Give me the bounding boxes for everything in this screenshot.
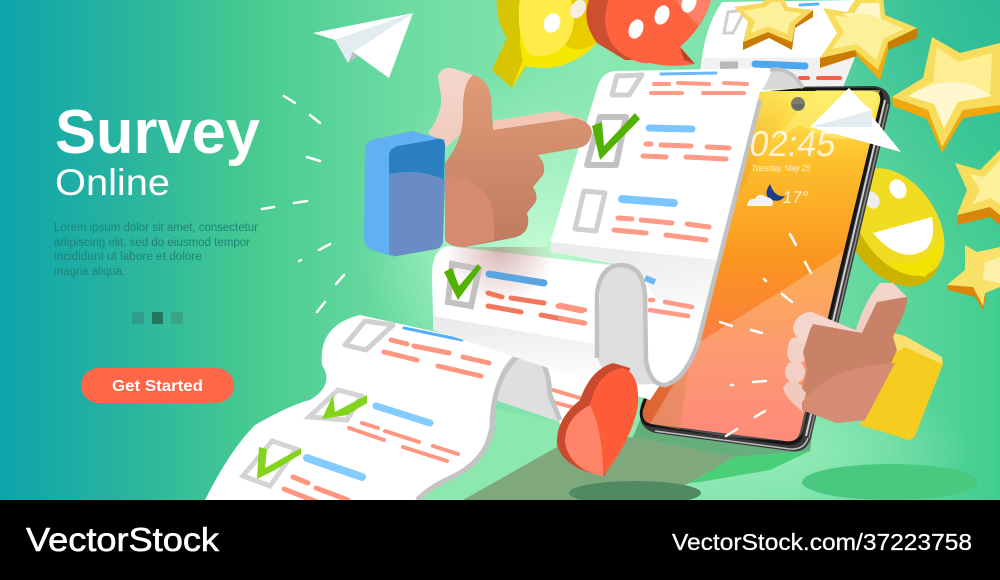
hand front (445, 75, 592, 247)
green check (592, 113, 640, 160)
body text: Lorem ipsum dolor sit amet, consectetur (54, 222, 258, 234)
thumbs up hand with yellow cuff (783, 283, 943, 440)
decorative burst rays left (262, 96, 344, 312)
phone frame (640, 86, 890, 451)
middle paper strip (432, 246, 660, 400)
hand light side (428, 68, 473, 147)
check box (448, 264, 479, 306)
back paper strip (700, 0, 855, 90)
main paper sheet (551, 68, 803, 385)
rows (404, 328, 462, 340)
star 3 (892, 37, 1000, 153)
phone screen (643, 91, 880, 441)
cuff (860, 335, 943, 440)
box 3 and check (243, 441, 296, 486)
rows on the fold beside the roll (645, 278, 655, 282)
yellow speech bubble (492, 0, 600, 88)
strip behind second roll (545, 365, 612, 425)
watermark footer bar: VectorStock (26, 521, 220, 558)
body text: magna aliqua. (54, 266, 125, 278)
heart (557, 363, 638, 476)
box 1 (345, 321, 393, 350)
paper roll interior (598, 266, 665, 385)
empty box (575, 191, 605, 231)
clock: 02:45 (747, 123, 839, 164)
lower paper strip (205, 315, 612, 502)
emoji smiley (822, 151, 964, 305)
button: Get Started (81, 368, 234, 403)
pointing hand with blue cuff (364, 68, 592, 257)
checked box (587, 117, 626, 165)
thumb light side (855, 283, 907, 333)
paper plane on phone (810, 88, 901, 152)
paper plane top (313, 13, 413, 78)
title: Survey Online: Survey (55, 98, 260, 167)
floor (415, 370, 978, 530)
fingers light side (788, 312, 862, 352)
title: Survey Online (55, 98, 260, 203)
cuff (364, 131, 445, 257)
star 5 (947, 245, 1000, 310)
body text: adipiscing elit, sed do eiusmod tempor (54, 237, 250, 249)
weather icon: 17° (781, 188, 810, 207)
star 2 (820, 0, 917, 80)
hump shadow side (495, 352, 560, 422)
hand front (802, 297, 907, 423)
date: Tuesday, May 25 (751, 163, 811, 173)
button: Get Started: Get Started (112, 378, 203, 395)
title: Survey Online: Online (55, 162, 170, 203)
checkbox top (612, 75, 642, 95)
watermark footer bar (0, 500, 1000, 580)
star 4 (955, 150, 1000, 225)
red speech bubble (586, 0, 712, 66)
smartphone (640, 86, 890, 451)
pagination dots (132, 312, 183, 324)
watermark footer bar: VectorStock.com/37223758 (672, 529, 972, 555)
body text: incididunt ut labore et dolore (54, 251, 202, 263)
weather icon (747, 184, 810, 207)
box 2 and check (309, 390, 361, 420)
star 1 (734, 0, 813, 50)
phone burst rays (720, 234, 811, 436)
body text (54, 222, 258, 278)
